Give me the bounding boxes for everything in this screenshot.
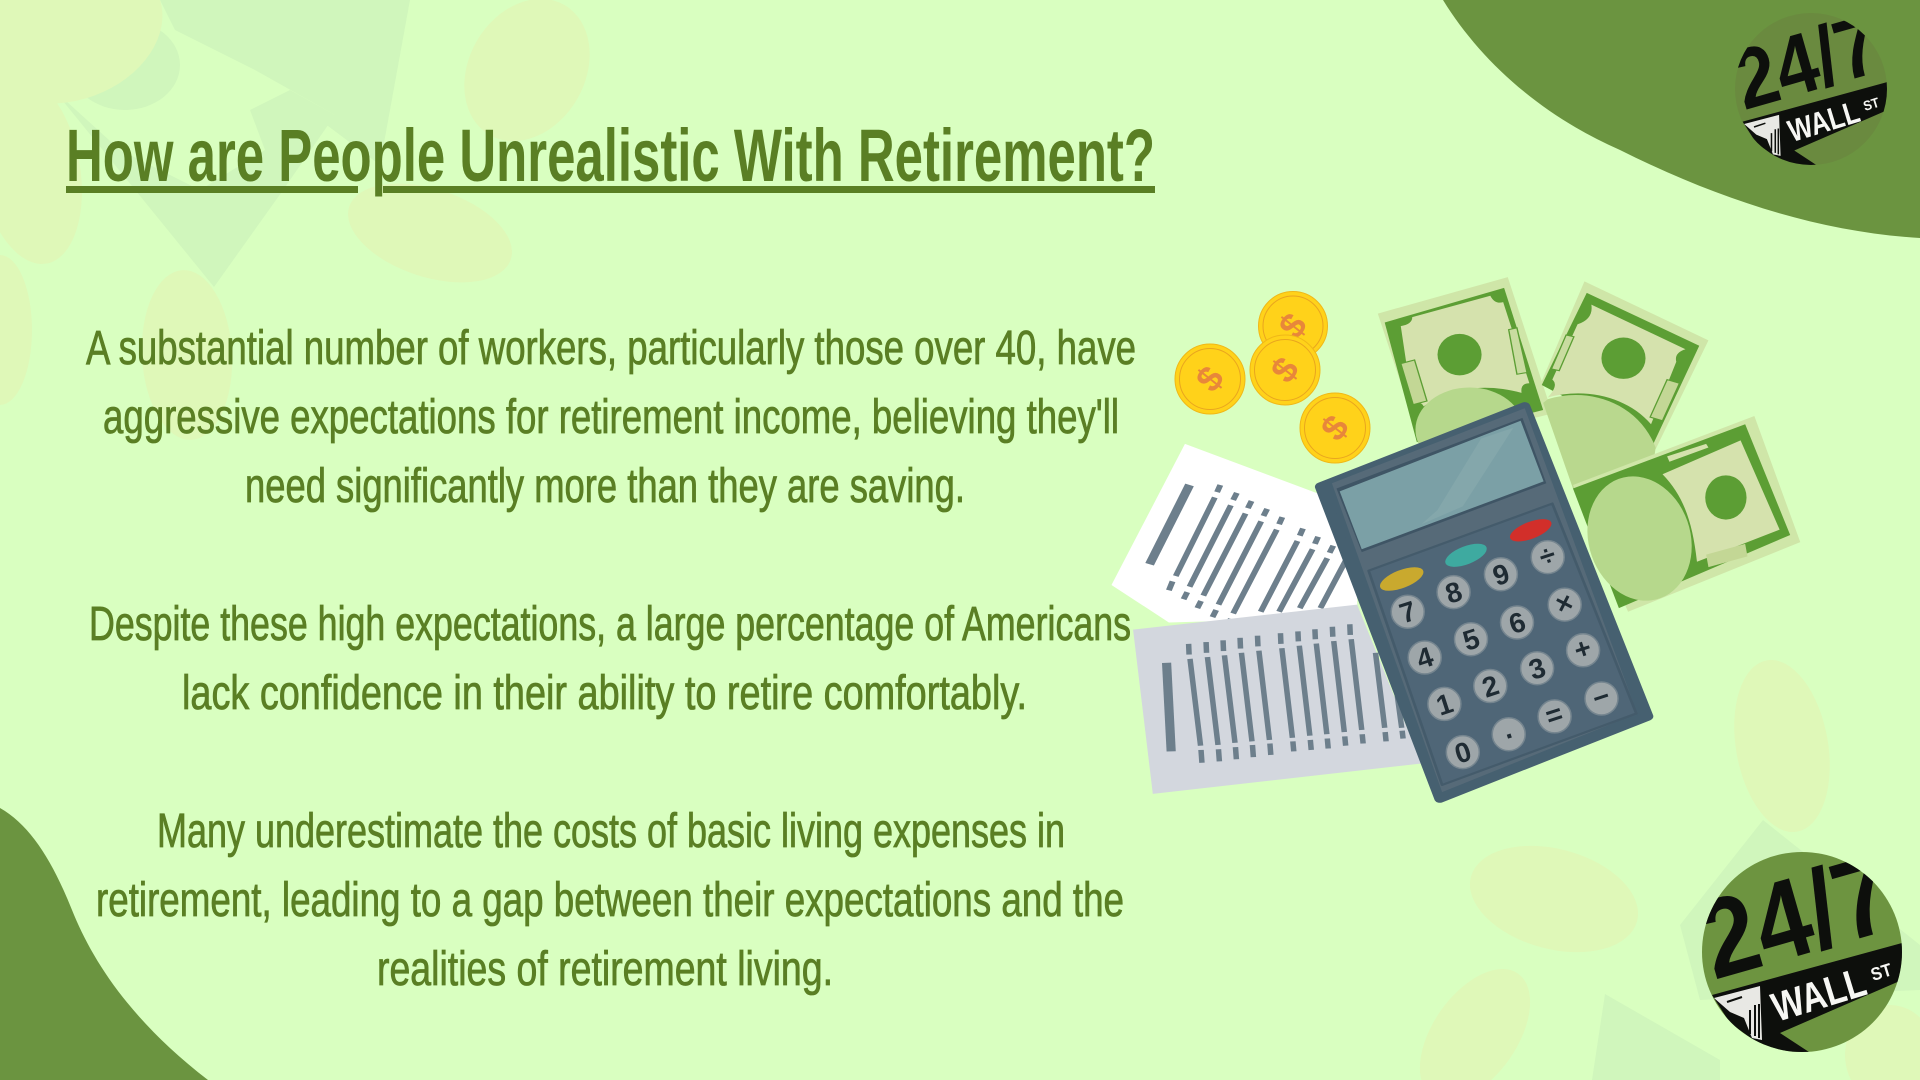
title [66,114,1155,197]
calculator key labels: . [1499,713,1515,745]
receipt: white [1111,444,1357,624]
calculator key labels: × [1552,586,1577,620]
gold coins: $ [1187,358,1232,399]
banknote: lower right [1573,416,1800,612]
illustration: money, receipts and calculator [1111,277,1800,799]
calculator key labels: 3 [1525,652,1549,686]
text block: lack of confidence [89,598,1131,720]
calculator key labels: − [1588,680,1614,714]
text block: lack of confidence: lack confidence in their ability to retire comfortably. [182,667,1027,720]
text block: aggressive expectations: aggressive expectations for retirement income, believing they'll [103,391,1119,444]
banknote: left [1378,277,1552,472]
gold coins: $ [1270,305,1315,346]
gold coins: $ [1312,407,1357,448]
calculator key labels: 4 [1413,641,1437,675]
decorative corner shape: bottom left [0,808,208,1080]
text block: aggressive expectations: need significantly more than they are saving. [245,460,965,513]
calculator key labels: 5 [1459,623,1483,657]
text block: aggressive expectations: A substantial number of workers, particularly those over 40, have [86,322,1136,375]
text block: underestimated costs: retirement, leading to a gap between their expectations and the [96,874,1124,927]
calculator key labels: 8 [1442,575,1466,610]
gold coins: $ [1262,349,1307,390]
calculator [1320,406,1648,799]
calculator key labels [1396,539,1614,770]
receipt: grey [1133,605,1421,794]
text block: underestimated costs: Many underestimate the costs of basic living expenses in [157,805,1065,858]
banknote: right [1541,281,1708,489]
calculator key labels: 9 [1489,558,1513,592]
text block: underestimated costs [96,805,1124,996]
calculator key labels: ÷ [1535,539,1559,573]
logo: top right 24/7 Wall St: ST [1861,95,1882,114]
calculator key labels: 1 [1432,687,1457,722]
text block: underestimated costs: realities of retirement living. [377,943,833,996]
calculator key labels: = [1542,698,1567,732]
logo: top right 24/7 Wall St: WALL [1784,94,1864,149]
logo: bottom right 24/7 Wall St: ST [1868,960,1894,985]
text block: lack of confidence: Despite these high expectations, a large percentage of Americans [89,598,1131,651]
calculator keys [1391,541,1618,769]
gold coins [1175,292,1370,463]
logo: bottom right 24/7 Wall St: WALL [1766,959,1871,1031]
logo: bottom right 24/7 Wall St [1702,852,1902,1052]
decorative corner shape: top right [1443,0,1920,238]
text block: aggressive expectations [86,322,1136,513]
calculator key labels: 0 [1451,735,1475,770]
calculator key labels: 6 [1505,606,1529,640]
calculator key labels: 7 [1396,595,1420,629]
calculator key labels: + [1570,632,1595,666]
calculator key labels: 2 [1478,669,1503,704]
title: How are People Unrealistic With Retirement? [66,114,1155,197]
logo: top right 24/7 Wall St [1735,13,1887,165]
